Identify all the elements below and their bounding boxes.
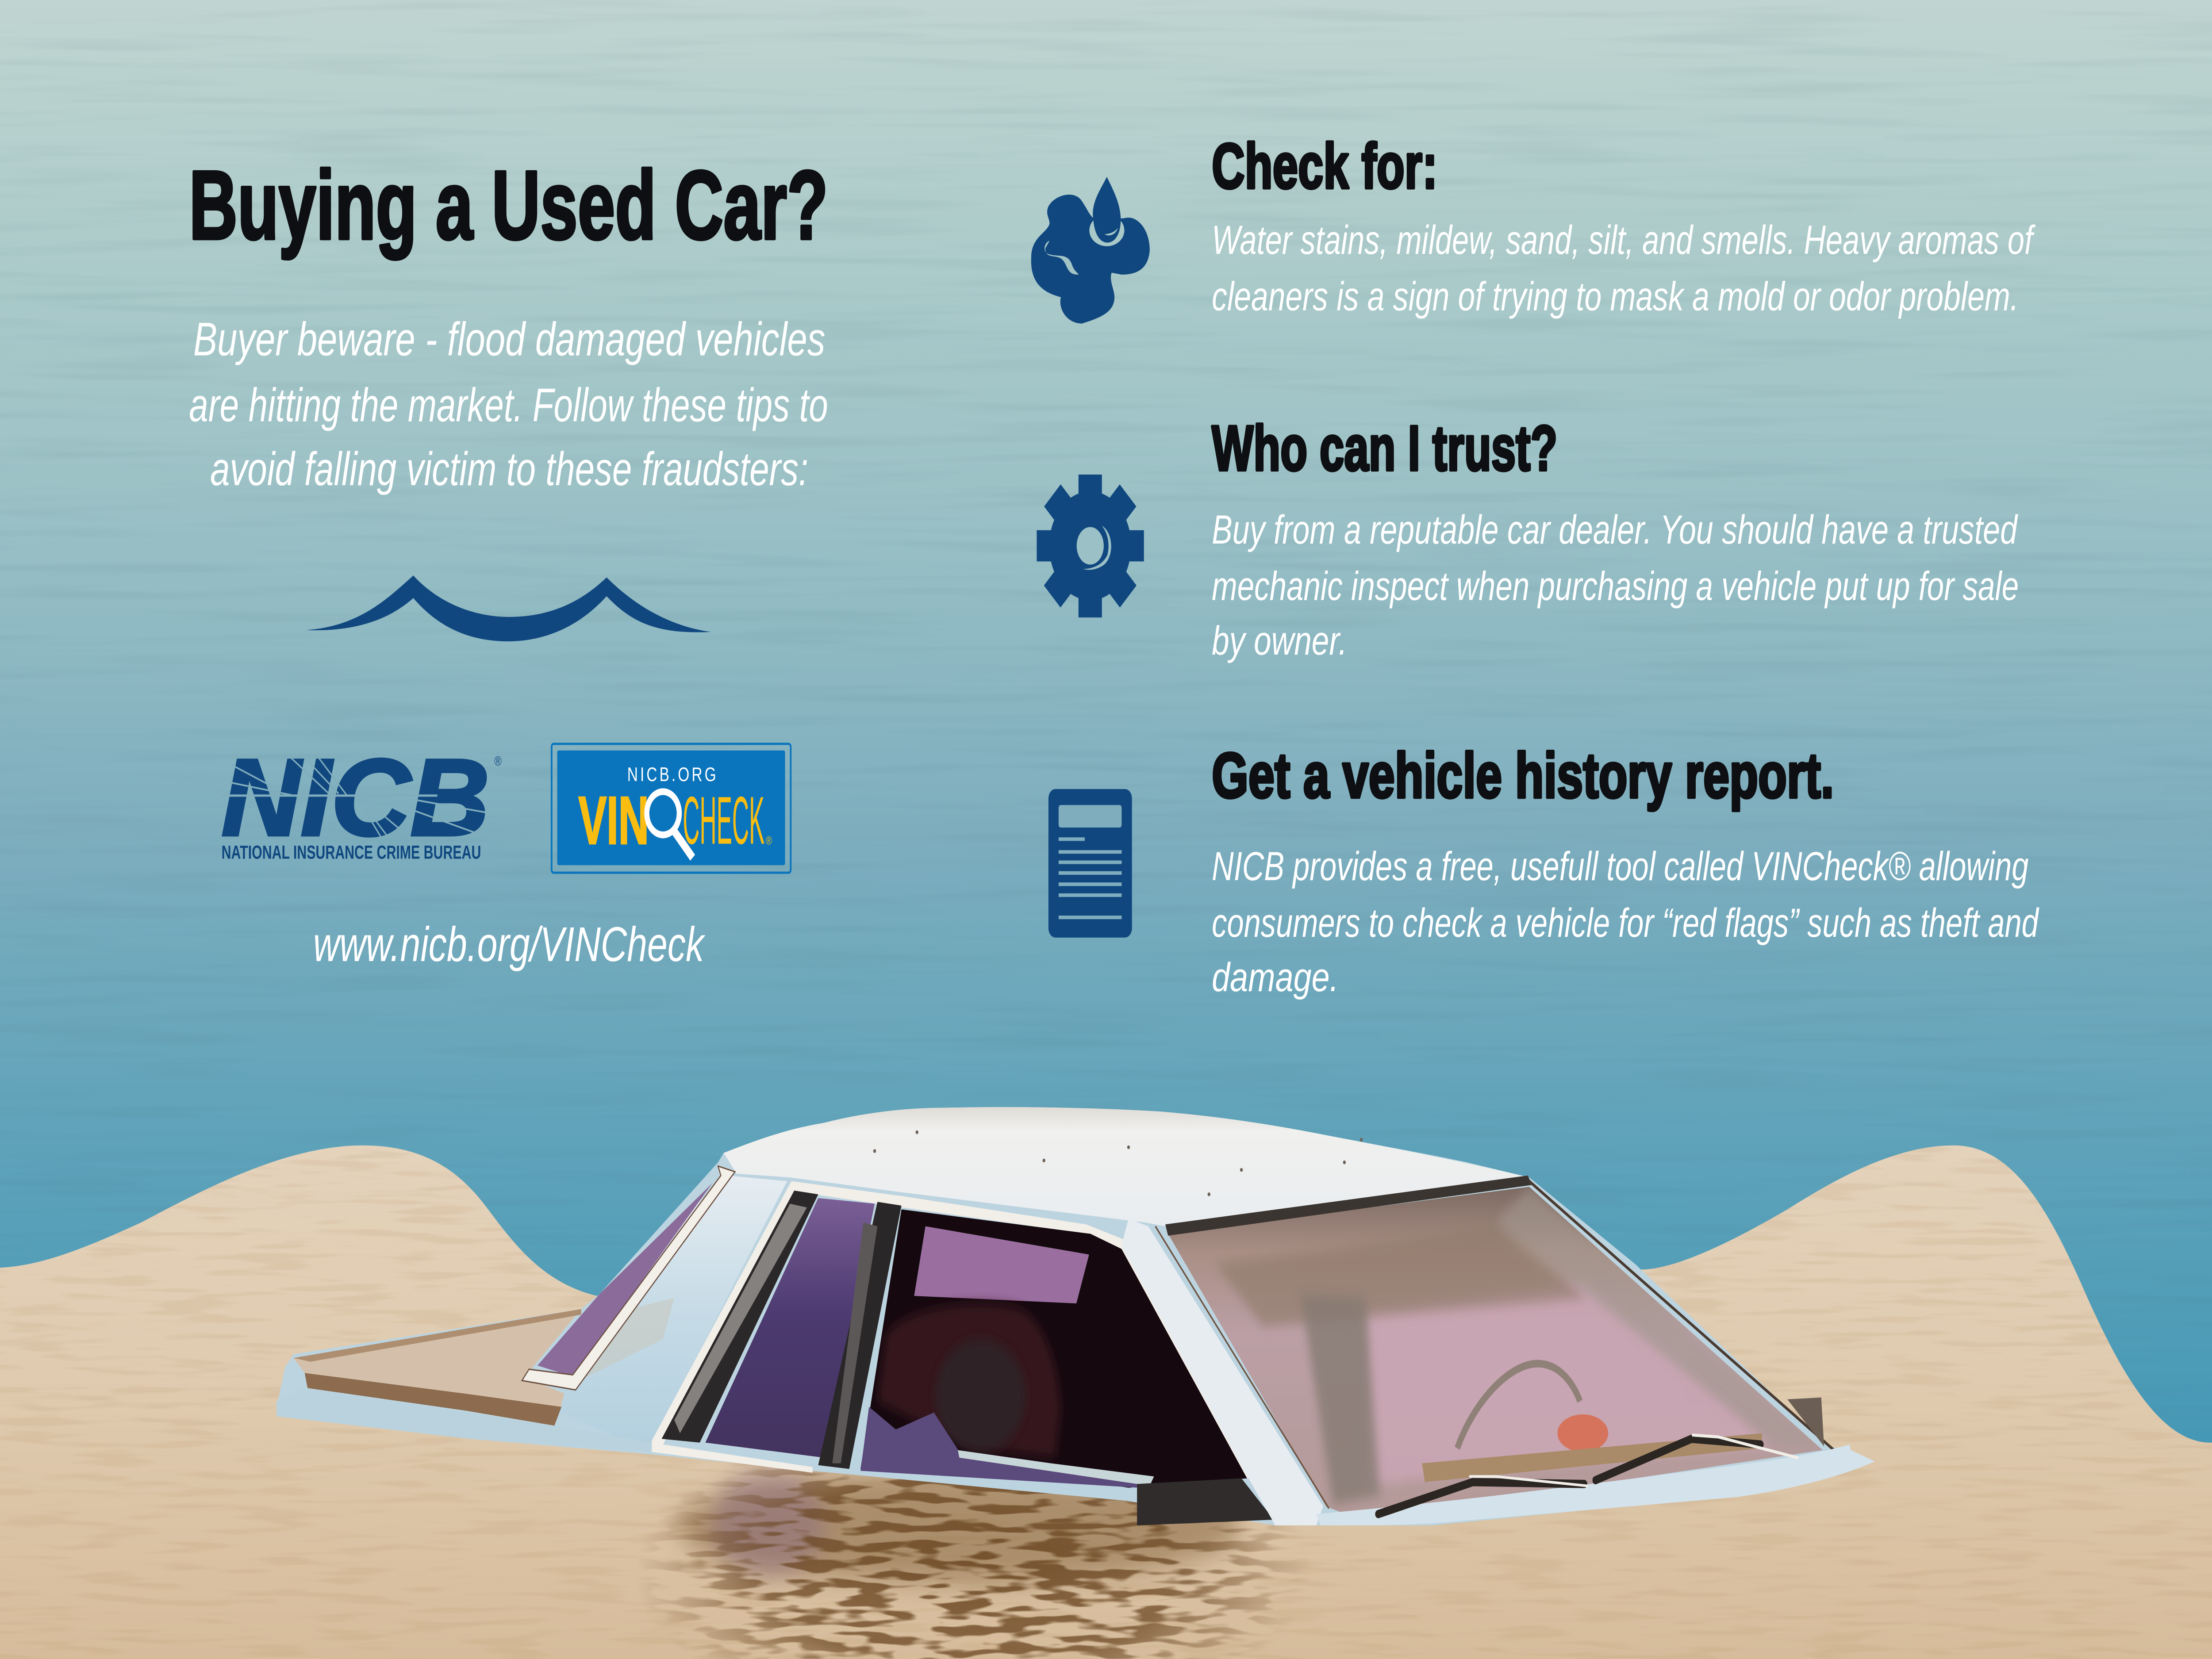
body text: NICB provides a free, usefull tool called VINCheck® allowing [1212,844,2029,889]
trunk lid [293,1309,581,1414]
body text [1212,218,2035,319]
body text: cleaners is a sign of trying to mask a mold or odor problem. [1212,274,2019,319]
heading: Who can I trust? [1212,413,1557,484]
body text: consumers to check a vehicle for “red flags” such as theft and [1212,900,2039,946]
logo: VINCheck: NICB.ORG [627,763,716,785]
rear door glass [705,1198,875,1458]
windshield [1168,1187,1823,1514]
windshield reflections [1216,1187,1823,1505]
intro paragraph: Buyer beware - flood damaged vehicles [193,313,825,365]
logo: VINCheck: VIN [578,783,649,858]
roof dirt specks [873,1130,1363,1196]
body text: Water stains, mildew, sand, silt, and smells. Heavy aromas of [1212,218,2035,263]
cowl strip [1316,1444,1875,1525]
logo: VINCheck [552,744,791,873]
flood sand wave [0,1129,2212,1659]
panel: left intro [189,151,828,641]
icon: wave divider [306,575,711,641]
rear window frame [522,1166,735,1390]
logo: NICB: ® [494,754,502,769]
water reflection of car [647,1463,1300,1659]
body text: by owner. [1212,618,1347,663]
rear window glass [538,1183,712,1377]
roof [724,1107,1529,1226]
car silhouette [276,1107,1875,1525]
photo: submerged car [276,1107,1875,1525]
body text [1212,508,2019,663]
A pillar [1121,1219,1323,1525]
panel: vehicle history report [1212,740,2039,1000]
heading: Get a vehicle history report. [1212,740,1834,812]
rear side waterline panel [276,1388,652,1452]
title: Buying a Used Car? [189,151,828,260]
far window through car [914,1226,1089,1303]
icon: gear [1037,475,1144,617]
icon: document report [1048,789,1132,938]
body text: damage. [1212,955,1339,1000]
seat [877,1304,1061,1458]
heading: Check for: [1212,130,1437,202]
icon: magnifier [647,792,693,858]
door mirror [1137,1479,1274,1525]
B pillar [818,1202,902,1469]
panel: check for [1212,130,2035,319]
windshield header strip [1165,1176,1532,1236]
red object on dash [1557,1414,1608,1452]
front door opening [860,1209,1247,1488]
logo: VINCheck: CHECK [683,783,764,858]
intro paragraph [189,313,828,495]
body text: Buy from a reputable car dealer. You should have a trusted [1212,508,2019,552]
rear quarter glass decal [662,1191,818,1443]
body text: mechanic inspect when purchasing a vehicle put up for sale [1212,564,2019,609]
intro paragraph: avoid falling victim to these fraudsters: [210,443,808,495]
broken door glass [860,1407,1144,1488]
C pillar light panel [557,1176,787,1443]
right mirror [1787,1398,1824,1446]
intro paragraph: are hitting the market. Follow these tips to [189,379,828,431]
body text [1212,844,2039,1000]
steering wheel [1457,1364,1580,1448]
logo: VINCheck: ® [766,835,772,847]
logo: NICB [222,737,502,862]
logo: NICB: NATIONAL INSURANCE CRIME BUREAU [222,842,481,862]
website URL: www.nicb.org/VINCheck [313,917,706,972]
wipers [1378,1435,1797,1514]
panel: who can I trust [1212,413,2019,663]
logo: NICB: NICB [222,737,490,858]
icon: water puddle [1031,177,1150,323]
windshield side trim [1529,1181,1834,1450]
dash debris band [1422,1433,1762,1482]
door frame white trim [652,1181,1248,1479]
